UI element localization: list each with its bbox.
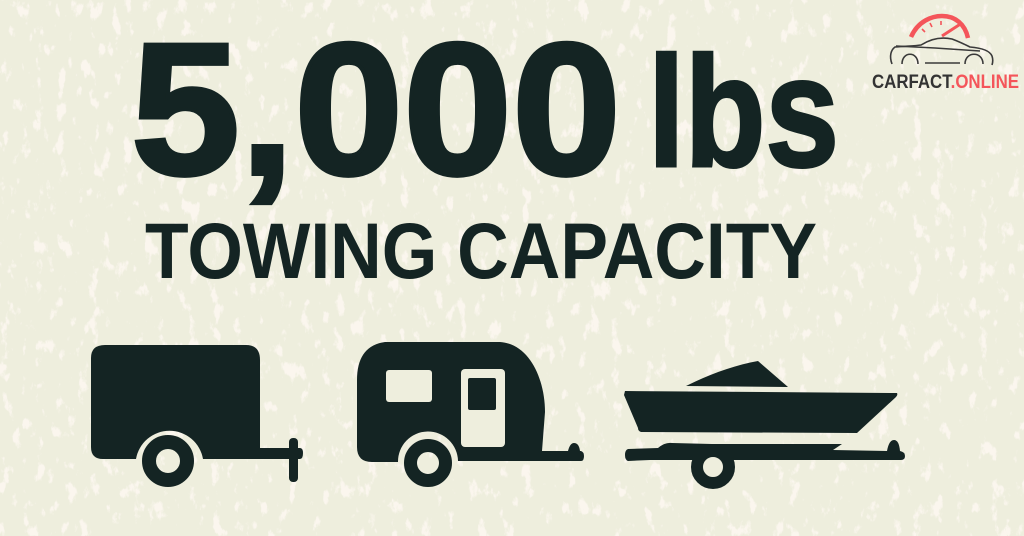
logo: carfact.online xyxy=(872,16,1019,93)
icon: car outline xyxy=(891,38,993,65)
heading: 5,000 lbs: 5,000 xyxy=(131,4,621,214)
boat hull xyxy=(624,391,897,433)
icon: camper trailer xyxy=(357,342,584,480)
door window xyxy=(468,378,496,410)
icon: boat on trailer xyxy=(624,361,905,483)
wheel xyxy=(410,446,446,480)
window xyxy=(386,370,432,402)
wheel xyxy=(149,442,187,480)
heading: 5,000 lbs xyxy=(131,4,839,214)
logo text: CARFACT.ONLINE xyxy=(872,72,1019,93)
door xyxy=(461,369,505,447)
hitch post xyxy=(289,438,298,482)
boat cabin xyxy=(686,361,788,387)
icon: cargo trailer xyxy=(91,345,303,482)
subheading: towing capacity: TOWING CAPACITY xyxy=(145,206,817,295)
icon: speedometer gauge xyxy=(911,16,968,38)
heading: 5,000 lbs: lbs xyxy=(648,25,839,200)
wheel xyxy=(697,451,729,483)
trailer frame xyxy=(625,440,905,461)
